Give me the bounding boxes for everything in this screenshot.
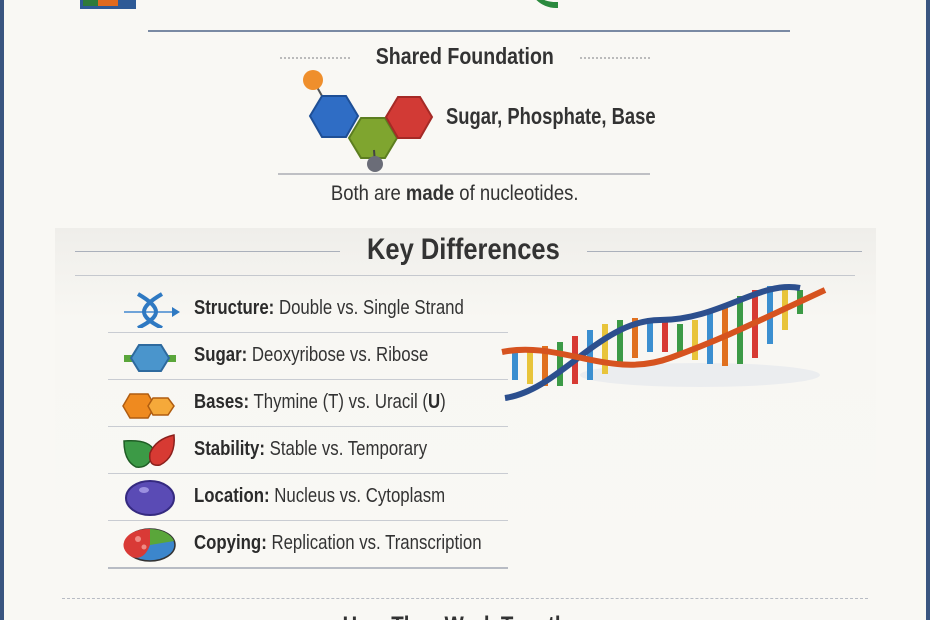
row: bases bbox=[108, 380, 508, 427]
row: structure: Structure: Double vs. Single Strand bbox=[194, 297, 464, 319]
caption: nucleotides: Both are made of nucleotides. bbox=[331, 182, 579, 205]
panel: key differences bbox=[55, 228, 876, 588]
row: stability bbox=[108, 427, 508, 474]
row: copying bbox=[108, 521, 508, 569]
divider bbox=[148, 30, 790, 32]
illustration: DNA double helix bbox=[501, 284, 826, 401]
row: copying: Copying: Replication vs. Transcription bbox=[194, 532, 482, 554]
divider dashed bbox=[62, 598, 868, 599]
heading: shared foundation: Shared Foundation bbox=[376, 43, 554, 69]
row: bases: Bases: Thymine (T) vs. Uracil (U) bbox=[194, 391, 446, 413]
row: sugar: Sugar: Deoxyribose vs. Ribose bbox=[194, 344, 428, 366]
row: structure bbox=[108, 286, 508, 333]
top icon: green arc bbox=[528, 0, 558, 8]
row: location bbox=[108, 474, 508, 521]
row: sugar bbox=[108, 333, 508, 380]
divider bbox=[278, 173, 650, 175]
top icon: ladder fragment bbox=[80, 0, 136, 9]
row: stability: Stability: Stable vs. Temporary bbox=[194, 438, 427, 460]
row: location: Location: Nucleus vs. Cytoplasm bbox=[194, 485, 445, 507]
icon: nucleotide molecule bbox=[303, 70, 434, 172]
heading: key differences: Key Differences bbox=[367, 233, 560, 266]
text: sugar phosphate base: Sugar, Phosphate, Base bbox=[446, 103, 656, 129]
